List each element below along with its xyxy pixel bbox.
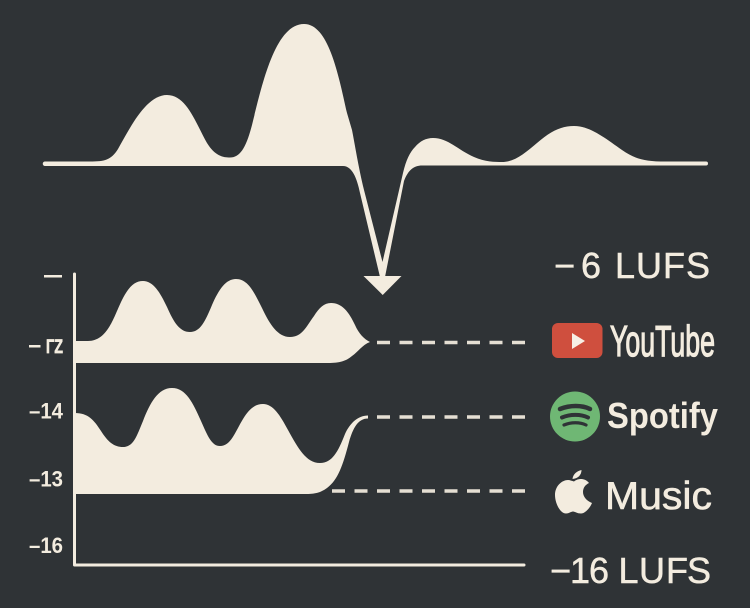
y-axis labels: –14 <box>29 398 64 424</box>
y-axis labels: ΓZ <box>46 337 63 358</box>
Spotify and Apple Music waveform <box>75 388 368 494</box>
Apple Music logo: Music <box>605 475 712 518</box>
Apple Music logo <box>555 470 712 518</box>
Spotify logo <box>550 392 718 442</box>
label: -6 LUFS: −6 LUFS <box>554 245 710 286</box>
icon: Spotify circle <box>550 392 600 442</box>
chart axes <box>74 274 524 565</box>
dashed connector: Apple Music <box>332 489 525 493</box>
dashed connector: YouTube <box>377 341 525 344</box>
top waveform with downward spike <box>43 24 708 295</box>
dashed connector: Spotify <box>377 415 525 419</box>
YouTube logo <box>552 317 715 366</box>
y-axis labels: –16 <box>29 533 63 558</box>
Spotify logo: Spotify <box>607 395 718 436</box>
YouTube waveform <box>75 279 370 363</box>
arrowhead <box>364 276 402 295</box>
y-axis labels: –13 <box>29 466 63 492</box>
label: -16 LUFS: −16 LUFS <box>550 550 711 591</box>
y-axis labels <box>29 275 64 558</box>
icon: Apple logo <box>555 470 592 514</box>
icon: YouTube play button <box>552 323 602 358</box>
